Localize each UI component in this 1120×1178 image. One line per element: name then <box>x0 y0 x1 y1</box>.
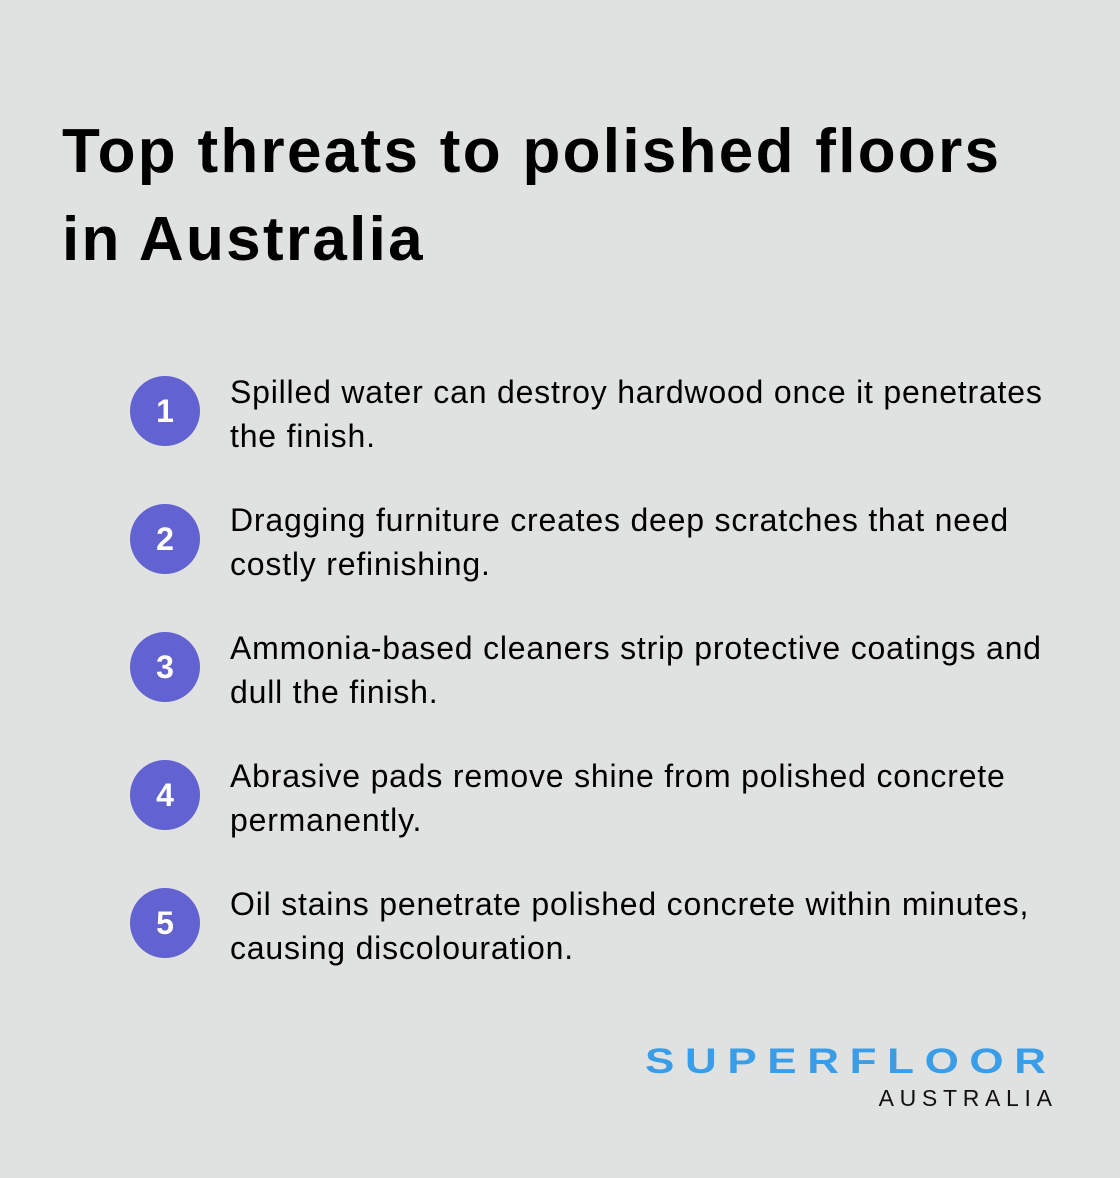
item 3: dull the finish. <box>230 674 438 710</box>
title <box>62 117 1001 274</box>
item 1 <box>130 374 1043 454</box>
logo <box>645 1042 1058 1111</box>
title: in Australia <box>62 205 425 274</box>
item 2: Dragging furniture creates deep scratches that need <box>230 502 1009 538</box>
item 3: 3 <box>156 649 174 685</box>
item 3 <box>130 630 1042 710</box>
item 5: 5 <box>156 905 174 941</box>
item 2 <box>130 502 1009 582</box>
item 1: Spilled water can destroy hardwood once it penetrates <box>230 374 1043 410</box>
item 4 <box>130 758 1006 838</box>
title: Top threats to polished floors <box>62 117 1001 186</box>
item 5: Oil stains penetrate polished concrete within minutes, <box>230 886 1029 922</box>
item 3: Ammonia-based cleaners strip protective coatings and <box>230 630 1042 666</box>
item 2: costly refinishing. <box>230 546 491 582</box>
logo: SUPERFLOOR <box>645 1042 1057 1081</box>
item 2: 2 <box>156 521 174 557</box>
item 5: causing discolouration. <box>230 930 574 966</box>
item 4: 4 <box>156 777 174 813</box>
item 4: permanently. <box>230 802 422 838</box>
item 5 <box>130 886 1029 966</box>
item 1: 1 <box>156 393 174 429</box>
item 1: the finish. <box>230 418 376 454</box>
logo: AUSTRALIA <box>879 1085 1058 1111</box>
item 4: Abrasive pads remove shine from polished concrete <box>230 758 1006 794</box>
